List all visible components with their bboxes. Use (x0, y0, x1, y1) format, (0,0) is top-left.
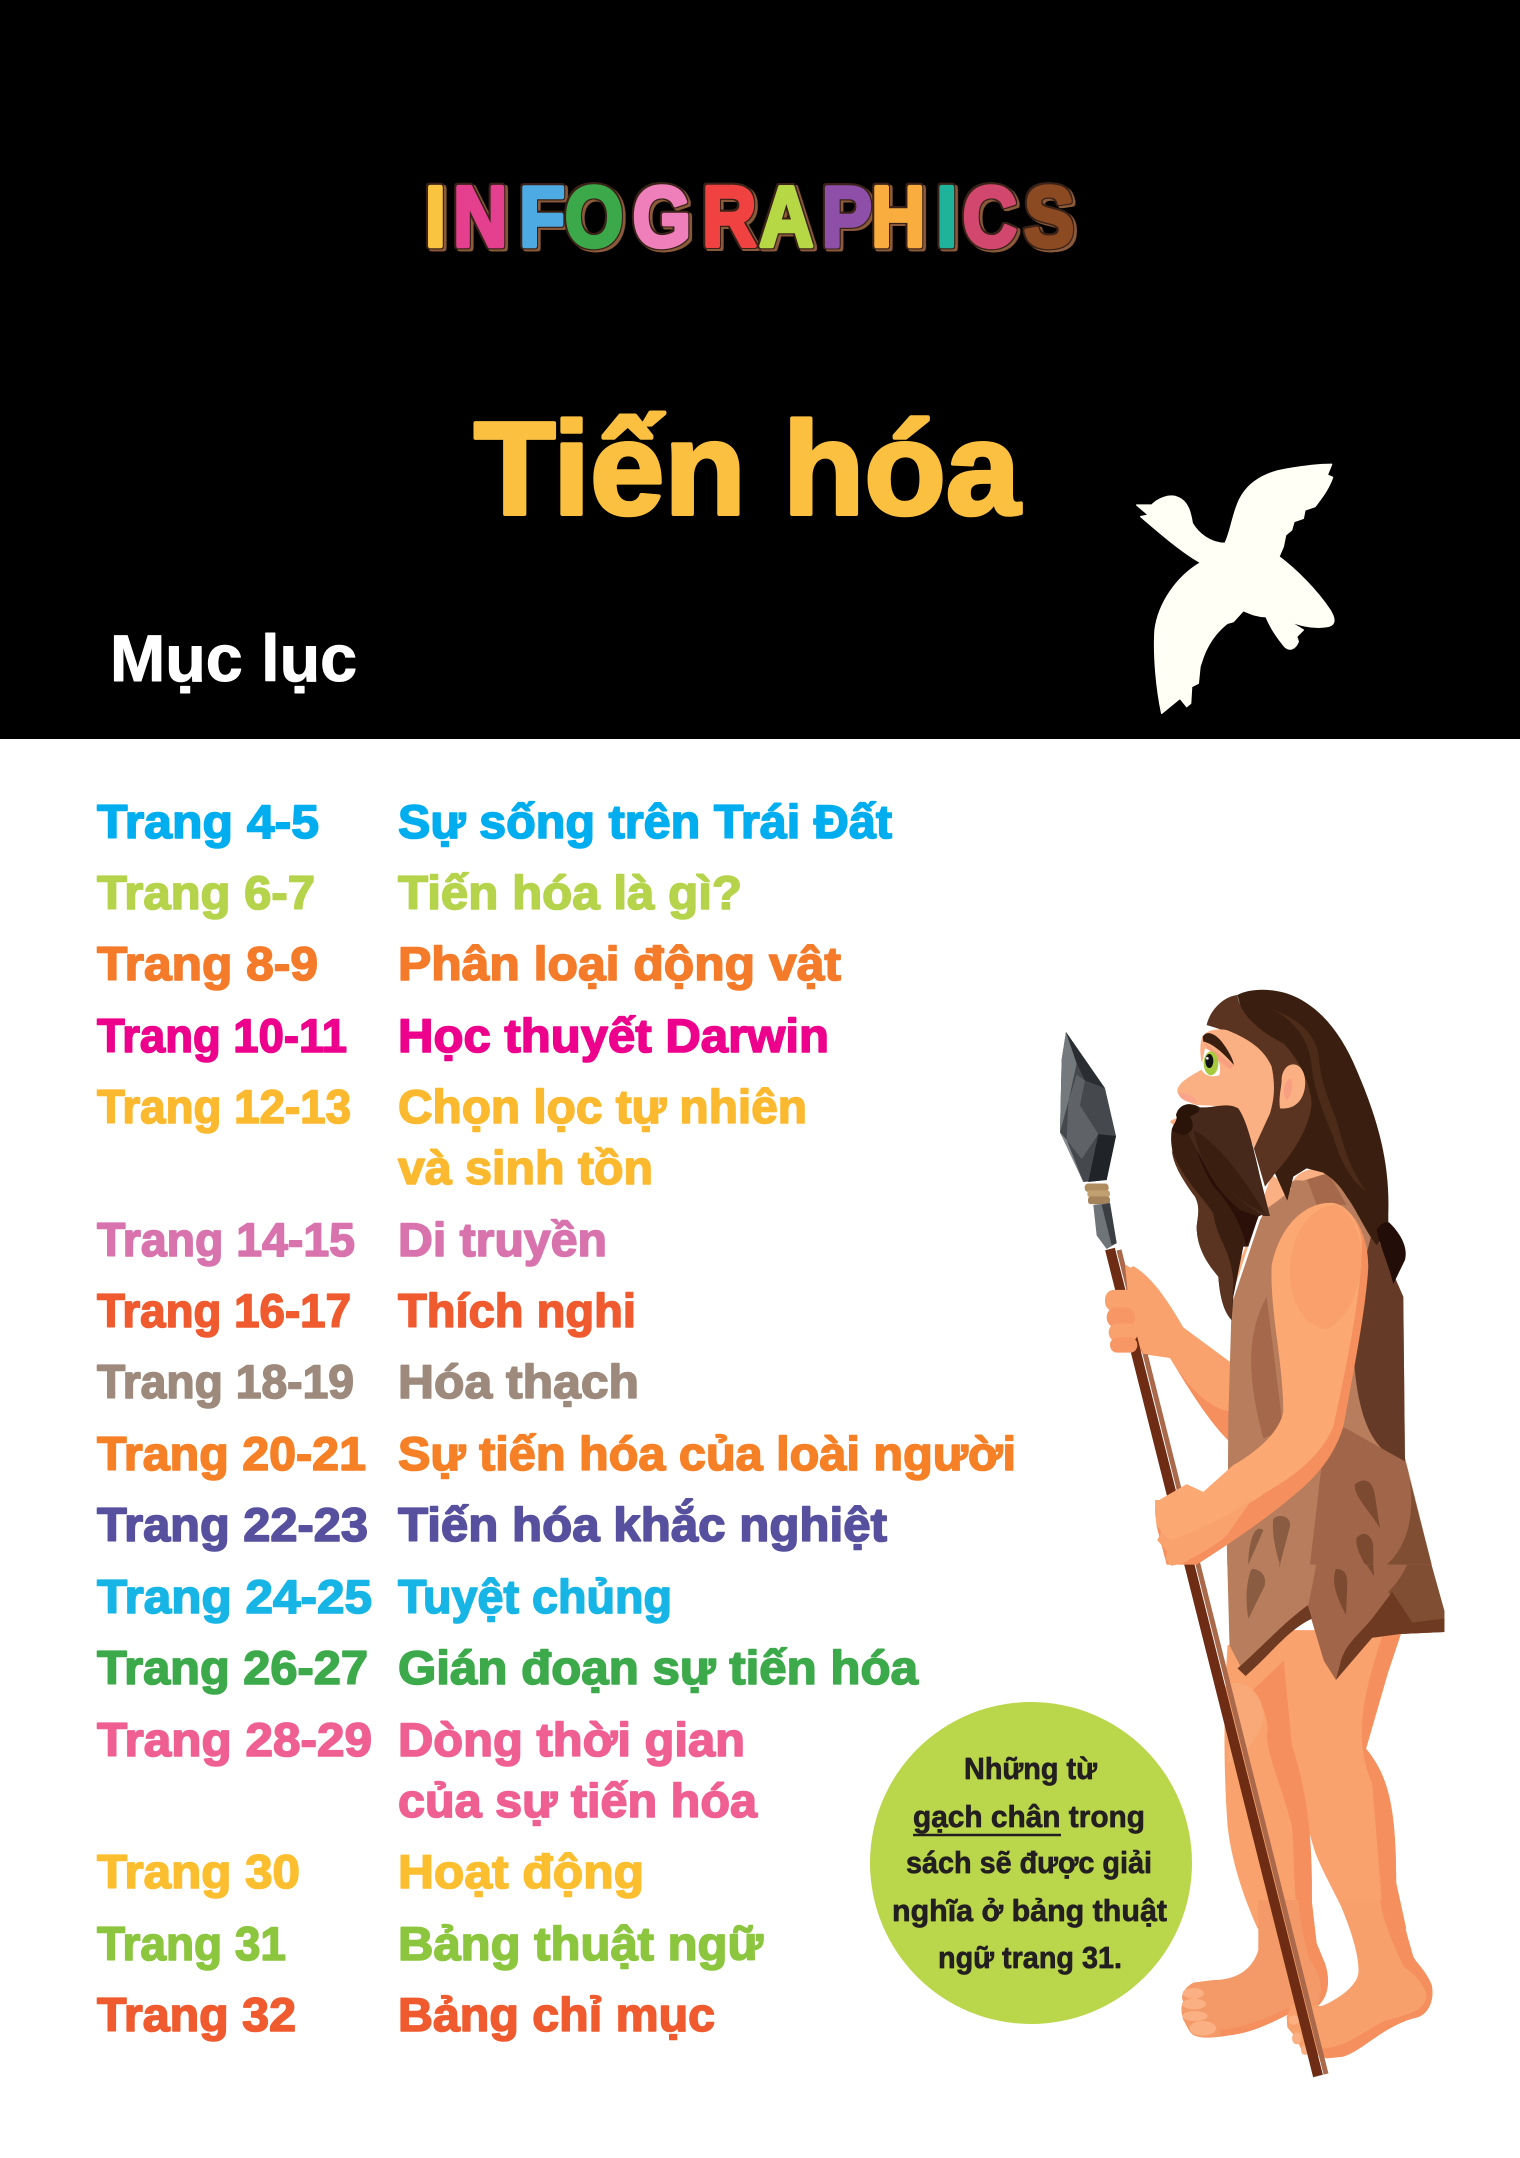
title: Tiến hóa (474, 395, 1022, 542)
row: Trang 32 (97, 1988, 715, 2041)
row: Trang 24-25: Tuyệt chủng (398, 1570, 672, 1623)
row: Trang 12-13: Chọn lọc tự nhiên (398, 1080, 807, 1133)
feet (1181, 1900, 1432, 2058)
illustration: caveman holding a spear (1060, 990, 1444, 2076)
row: Trang 30: Hoạt động (398, 1845, 644, 1898)
row: Trang 24-25 (97, 1570, 672, 1623)
row: Trang 12-13: và sinh tồn (398, 1141, 653, 1194)
row: Trang 18-19 (97, 1355, 639, 1408)
row: Trang 20-21: Trang 20-21 (97, 1427, 366, 1480)
row: Trang 4-5 (97, 795, 892, 848)
callout: glossary note: Những từ (964, 1751, 1098, 1786)
series logo: INFOGRAPHICS: INFOGRAPHICS (425, 170, 1074, 264)
row: Trang 26-27: Trang 26-27 (97, 1641, 368, 1694)
callout: glossary note: gạch chân trong (913, 1799, 1145, 1834)
row: Trang 10-11 (97, 1009, 829, 1062)
near hand (1155, 1500, 1252, 1566)
row: Trang 8-9 (97, 937, 841, 990)
row: Trang 28-29: của sự tiến hóa (398, 1774, 758, 1827)
row: Trang 26-27: Gián đoạn sự tiến hóa (398, 1641, 919, 1694)
row: Trang 31 (97, 1917, 764, 1970)
row: Trang 10-11: Trang 10-11 (97, 1009, 347, 1062)
row: Trang 22-23: Tiến hóa khắc nghiệt (398, 1498, 887, 1551)
row: Trang 16-17: Trang 16-17 (97, 1284, 351, 1337)
row: Trang 30 (97, 1845, 644, 1898)
row: Trang 14-15: Di truyền (398, 1213, 607, 1266)
far hand gripping spear (1105, 1264, 1174, 1354)
row: Trang 32: Trang 32 (97, 1988, 296, 2041)
row: Trang 6-7 (97, 866, 742, 919)
tunic upper part (1227, 1167, 1432, 1565)
row: Trang 26-27 (97, 1641, 919, 1694)
spear stone head and binding (1060, 1032, 1117, 1249)
neck skin (1232, 1170, 1325, 1297)
row: Trang 18-19: Trang 18-19 (97, 1355, 354, 1408)
row: Trang 31: Trang 31 (97, 1917, 286, 1970)
spear shaft (1110, 1249, 1326, 2076)
row: Trang 28-29 (97, 1713, 758, 1827)
near arm (1155, 1203, 1368, 1565)
row: Trang 28-29: Trang 28-29 (97, 1713, 372, 1766)
row: Trang 20-21 (97, 1427, 1016, 1480)
row: Trang 8-9: Phân loại động vật (398, 937, 841, 990)
row: Trang 16-17 (97, 1284, 636, 1337)
row: Trang 30: Trang 30 (97, 1845, 300, 1898)
row: Trang 22-23 (97, 1498, 887, 1551)
panel: black header (0, 0, 1520, 739)
table of contents list (97, 795, 1016, 2041)
callout: glossary note (870, 1702, 1192, 2024)
row: Trang 24-25: Trang 24-25 (97, 1570, 372, 1623)
row: Trang 16-17: Thích nghi (398, 1284, 636, 1337)
row: Trang 10-11: Học thuyết Darwin (398, 1009, 829, 1062)
row: Trang 20-21: Sự tiến hóa của loài người (398, 1427, 1016, 1480)
tunic lower part (1225, 1496, 1444, 1680)
legs (1224, 1630, 1406, 1929)
far arm (1126, 1266, 1230, 1442)
row: Trang 31: Bảng thuật ngữ (398, 1917, 764, 1970)
row: Trang 14-15 (97, 1213, 607, 1266)
callout: glossary note: ngữ trang 31. (938, 1940, 1122, 1975)
row: Trang 6-7: Tiến hóa là gì? (398, 866, 742, 919)
row: Trang 12-13: Trang 12-13 (97, 1080, 351, 1133)
beard (1171, 1104, 1270, 1320)
heading: Mục lục: Mục lục (110, 621, 357, 695)
row: Trang 12-13 (97, 1080, 807, 1194)
row: Trang 14-15: Trang 14-15 (97, 1213, 355, 1266)
icon: white flying bird silhouette (1137, 464, 1334, 713)
row: Trang 4-5: Trang 4-5 (97, 795, 319, 848)
callout: glossary note: sách sẽ được giải (906, 1845, 1152, 1880)
face (1170, 1029, 1305, 1148)
row: Trang 4-5: Sự sống trên Trái Đất (398, 795, 892, 848)
row: Trang 18-19: Hóa thạch (398, 1355, 639, 1408)
hair (1207, 990, 1406, 1284)
row: Trang 6-7: Trang 6-7 (97, 866, 315, 919)
callout: glossary note: nghĩa ở bảng thuật (892, 1893, 1167, 1928)
row: Trang 22-23: Trang 22-23 (97, 1498, 368, 1551)
row: Trang 8-9: Trang 8-9 (97, 937, 318, 990)
row: Trang 32: Bảng chỉ mục (398, 1988, 715, 2041)
row: Trang 28-29: Dòng thời gian (398, 1713, 745, 1766)
